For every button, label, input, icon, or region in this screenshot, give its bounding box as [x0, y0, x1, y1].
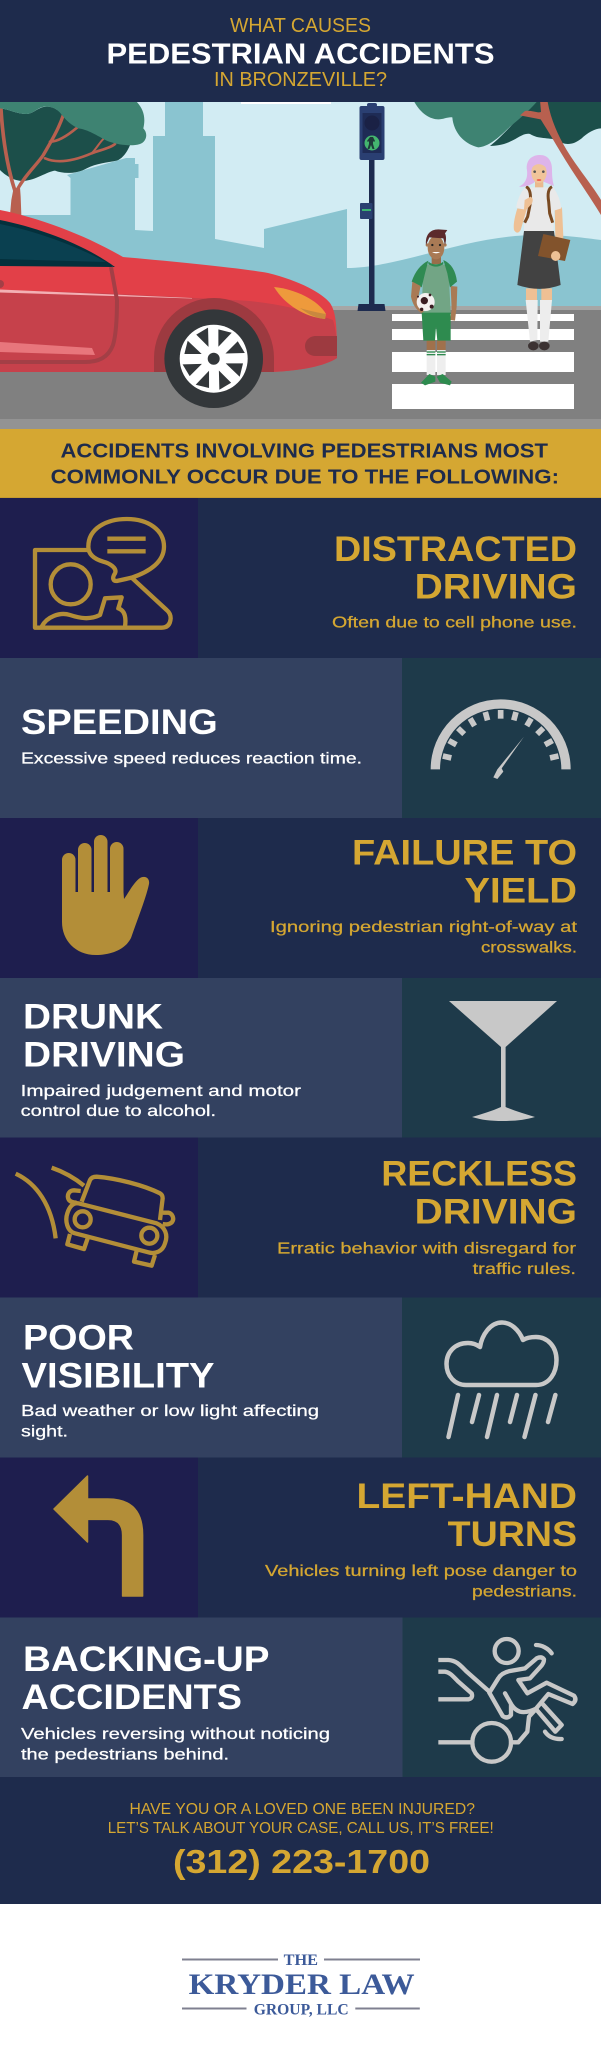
text: backing-up accidents: Vehicles reversing without noticing: [21, 1726, 330, 1743]
text: reckless driving: [277, 1154, 577, 1278]
panel: speeding: [0, 658, 601, 818]
text: failure to yield: Ignoring pedestrian right-of-way at: [270, 919, 578, 936]
illustration: street scene: [0, 100, 601, 429]
panel: distracted driving: [0, 498, 601, 658]
panel: reckless driving: [0, 1138, 601, 1298]
text: reckless driving: traffic rules.: [473, 1261, 576, 1278]
wheel arch: [154, 298, 274, 372]
text: poor visibility: Bad weather or low light affecting: [21, 1403, 319, 1420]
text: poor visibility: sight.: [21, 1424, 68, 1441]
panel: poor visibility: [0, 1298, 601, 1458]
logo: The Kryder Law Group: [182, 1952, 420, 2019]
text: distracted driving: DISTRACTED: [334, 530, 577, 569]
panel: backing-up accidents: [0, 1618, 601, 1777]
wheel: [164, 309, 263, 408]
title: pedestrian accidents: PEDESTRIAN ACCIDENTS: [106, 38, 494, 70]
panel: left-hand turns: [0, 1458, 601, 1618]
text: poor visibility: POOR: [23, 1318, 134, 1357]
text: phone number: (312) 223-1700: [173, 1843, 430, 1880]
tree: right: [413, 100, 601, 215]
text: failure to yield: FAILURE TO: [352, 833, 577, 872]
figure: boy with soccer ball: [411, 229, 457, 385]
icon: raised hand: [62, 835, 149, 955]
text: failure to yield: YIELD: [464, 871, 577, 910]
logo: The Kryder Law Group: KRYDER LAW: [189, 1968, 415, 2001]
text: reckless driving: RECKLESS: [381, 1154, 577, 1193]
panel: call to action: [0, 1777, 601, 1904]
logo: The Kryder Law Group: GROUP, LLC: [254, 2002, 349, 2019]
icon: pedestrian hit by car: [438, 1639, 575, 1762]
text: backing-up accidents: ACCIDENTS: [22, 1678, 242, 1717]
text: injured question: HAVE YOU OR A LOVED ONE BEEN INJURED?: [130, 1801, 475, 1818]
text: left-hand turns: TURNS: [448, 1515, 577, 1554]
crosswalk: [392, 314, 574, 409]
icon: left turn arrow: [54, 1476, 143, 1596]
text: backing-up accidents: the pedestrians behind.: [21, 1747, 229, 1764]
panel: header: [0, 0, 601, 102]
panel: drunk driving: [0, 978, 601, 1138]
icon: martini glass: [449, 1001, 557, 1121]
text: drunk driving: Impaired judgement and motor: [21, 1083, 302, 1100]
icon: rain cloud: [446, 1322, 556, 1437]
traffic light: [358, 103, 386, 311]
text: poor visibility: [21, 1318, 319, 1441]
text: distracted driving: DRIVING: [415, 568, 577, 607]
icon: skidding car: [16, 1168, 173, 1266]
city skyline and hill: [0, 102, 601, 320]
banner: intro: ACCIDENTS INVOLVING PEDESTRIANS MOST: [60, 440, 548, 462]
text: drunk driving: [21, 998, 302, 1120]
text: speeding: SPEEDING: [21, 703, 218, 742]
car window: [0, 220, 115, 267]
text: speeding: Excessive speed reduces reaction time.: [21, 751, 362, 768]
text: failure to yield: [270, 833, 578, 957]
icon: speedometer: [431, 699, 571, 779]
text: distracted driving: Often due to cell phone use.: [332, 615, 577, 632]
banner: intro: COMMONLY OCCUR DUE TO THE FOLLOWING:: [51, 466, 559, 488]
text: left-hand turns: Vehicles turning left pose danger to: [265, 1563, 577, 1580]
text: reckless driving: DRIVING: [415, 1192, 577, 1231]
figure: girl with backpack: [514, 155, 570, 350]
text: poor visibility: VISIBILITY: [22, 1356, 214, 1395]
text: failure to yield: crosswalks.: [481, 940, 577, 957]
text: backing-up accidents: [21, 1640, 330, 1764]
heading: in bronzeville: IN BRONZEVILLE?: [214, 69, 387, 91]
logo: The Kryder Law Group: THE: [284, 1952, 318, 1969]
text: left-hand turns: pedestrians.: [472, 1584, 577, 1600]
text: backing-up accidents: BACKING-UP: [23, 1640, 270, 1679]
text: speeding: [21, 703, 362, 768]
text: drunk driving: control due to alcohol.: [21, 1103, 216, 1120]
text: drunk driving: DRIVING: [23, 1036, 185, 1075]
illustration: red car: [0, 210, 337, 408]
text: left-hand turns: [265, 1477, 577, 1600]
banner: intro: [0, 429, 601, 498]
heading: what causes: WHAT CAUSES: [230, 15, 371, 37]
text: talk about your case: LET’S TALK ABOUT YOUR CASE, CALL US, IT’S FREE!: [108, 1820, 494, 1837]
tree: left: [0, 100, 146, 215]
panel: failure to yield: [0, 818, 601, 978]
road: [0, 306, 601, 429]
icon: phone user with speech bubble: [35, 519, 171, 628]
text: reckless driving: Erratic behavior with disregard for: [277, 1240, 577, 1257]
text: distracted driving: [332, 530, 577, 632]
text: left-hand turns: LEFT-HAND: [356, 1477, 577, 1516]
text: drunk driving: DRUNK: [23, 998, 163, 1037]
